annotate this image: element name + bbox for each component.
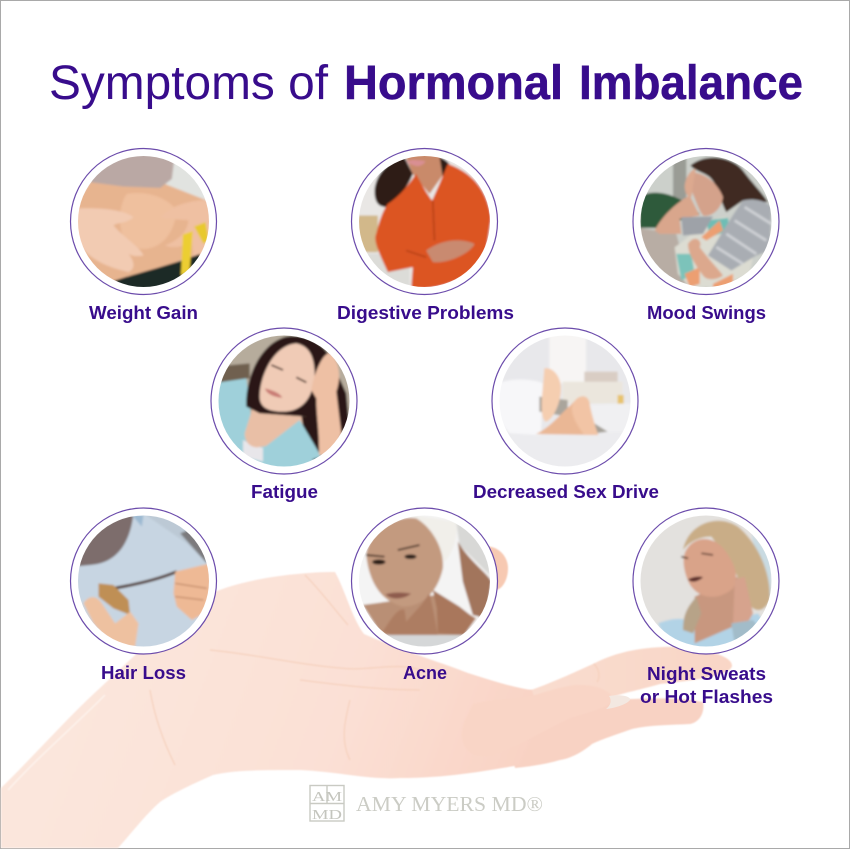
photo ring <box>633 508 779 654</box>
panel: acne <box>352 508 498 683</box>
photo: woman hugging a pillow <box>640 156 772 287</box>
label: Digestive Problems <box>337 303 514 323</box>
label: Hair Loss <box>101 663 186 683</box>
label: Fatigue <box>251 482 318 502</box>
photo ring <box>352 148 498 294</box>
hand: fingernail <box>606 695 630 709</box>
panel: decreased sex drive <box>473 328 659 502</box>
logo mark <box>310 786 344 821</box>
photo: hair in a brush <box>78 516 209 646</box>
photo ring <box>70 508 216 654</box>
hand illustration <box>1 546 732 848</box>
hand: thumb tip <box>470 546 508 590</box>
label <box>640 664 773 707</box>
hand: ring finger <box>500 690 703 768</box>
photo: older woman touching her neck <box>640 516 772 646</box>
title: Imbalance <box>579 57 803 110</box>
logo: Amy Myers MD <box>310 786 543 823</box>
label: Night Sweats <box>647 664 766 684</box>
title: Symptoms of <box>49 57 329 110</box>
logo wordmark: AMY MYERS MD® <box>356 792 543 816</box>
label: Mood Swings <box>647 303 766 323</box>
photo ring <box>70 148 216 294</box>
title <box>49 57 803 110</box>
panel: mood swings <box>633 148 779 323</box>
panel: hair loss <box>70 508 216 683</box>
photo: feet on white bed <box>502 336 630 466</box>
photo ring <box>492 328 638 474</box>
label: Weight Gain <box>89 303 198 323</box>
label: or Hot Flashes <box>640 687 773 707</box>
logo: Amy Myers MD: AM <box>312 790 343 805</box>
panel: night sweats or hot flashes <box>633 508 779 707</box>
title: Hormonal <box>344 57 563 110</box>
hand: palm creases <box>150 575 599 765</box>
logo: Amy Myers MD: MD <box>312 808 342 823</box>
photo: waist being measured <box>78 156 209 287</box>
panel: digestive problems <box>337 148 514 323</box>
photo ring <box>352 508 498 654</box>
photo ring <box>211 328 357 474</box>
photo: tired woman resting head on hand <box>218 336 350 466</box>
panel: weight gain <box>70 148 216 323</box>
label: Acne <box>403 663 447 683</box>
panel: fatigue <box>211 328 357 502</box>
photo ring <box>633 148 779 294</box>
hand: forearm highlight <box>8 695 105 790</box>
hand: index finger <box>462 685 614 757</box>
hand: little finger <box>525 647 732 705</box>
label: Decreased Sex Drive <box>473 482 659 502</box>
hand: palm and forearm <box>1 572 540 848</box>
photo: woman in orange shirt holding stomach <box>359 156 490 287</box>
photo: woman checking her skin in mirror <box>359 516 490 646</box>
